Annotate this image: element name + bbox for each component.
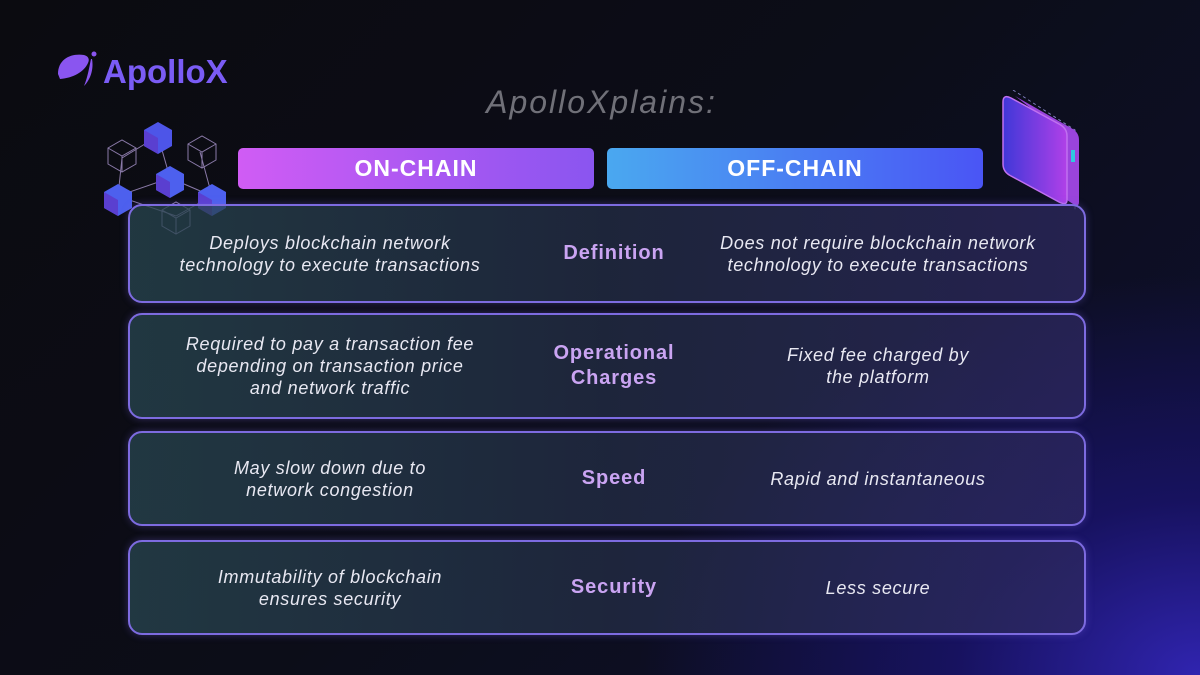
row: operational charges bbox=[128, 313, 1086, 419]
row: definition: Does not require blockchain network bbox=[720, 232, 1036, 252]
icon: blockchain cubes bbox=[104, 122, 226, 234]
row: speed: May slow down due to bbox=[234, 458, 426, 478]
row: operational charges: Charges bbox=[571, 367, 657, 389]
row: speed bbox=[128, 431, 1086, 526]
row: speed: Rapid and instantaneous bbox=[770, 468, 986, 488]
row: speed: Speed bbox=[582, 467, 646, 489]
row: security: Immutability of blockchain bbox=[218, 566, 442, 586]
row: security bbox=[128, 540, 1086, 635]
header: on-chain bbox=[238, 148, 594, 189]
row: operational charges: and network traffic bbox=[250, 378, 410, 398]
row: security: Security bbox=[571, 576, 657, 598]
row: definition: Definition bbox=[563, 242, 665, 264]
row: security: ensures security bbox=[259, 588, 401, 608]
row: operational charges: Required to pay a transaction fee bbox=[186, 334, 474, 354]
title: ApolloXplains: bbox=[486, 84, 717, 120]
header: on-chain: ON-CHAIN bbox=[354, 155, 478, 181]
row: definition: technology to execute transactions bbox=[728, 254, 1028, 274]
logo: ApolloX bbox=[103, 53, 228, 90]
row: operational charges: Fixed fee charged by bbox=[787, 345, 969, 365]
row: operational charges: depending on transaction price bbox=[196, 356, 464, 376]
row: operational charges: Operational bbox=[553, 342, 675, 364]
row: speed: network congestion bbox=[246, 480, 414, 500]
icon: wallet bbox=[1002, 90, 1079, 210]
row: definition bbox=[128, 204, 1086, 303]
row: definition: Deploys blockchain network bbox=[209, 232, 451, 252]
row: definition: technology to execute transactions bbox=[180, 254, 480, 274]
header: off-chain bbox=[607, 148, 983, 189]
header: off-chain: OFF-CHAIN bbox=[727, 155, 863, 181]
row: operational charges: the platform bbox=[826, 367, 930, 387]
row: security: Less secure bbox=[826, 578, 930, 598]
